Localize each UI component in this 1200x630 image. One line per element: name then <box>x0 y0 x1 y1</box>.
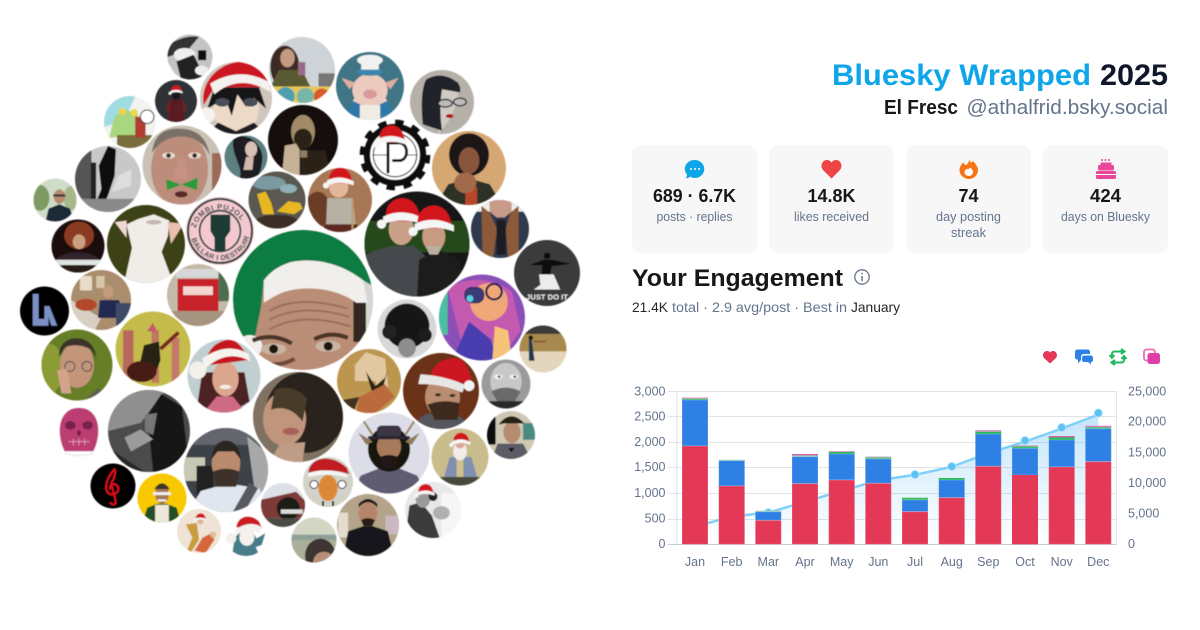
avatar cluster <box>19 34 581 564</box>
left axis labels: 1,500 <box>634 460 666 474</box>
avatar: pig chef <box>336 52 404 130</box>
cumulative area <box>695 414 1098 544</box>
stat card: streak: streak <box>951 226 987 240</box>
bar: Oct <box>1012 445 1038 544</box>
avatar: treble clef <box>90 464 136 508</box>
avatar: anime santa <box>199 62 272 134</box>
avatar: zombi pujol badge <box>186 196 254 266</box>
engagement summary: January <box>851 299 900 315</box>
month labels: Mar <box>758 555 779 569</box>
month labels <box>685 555 1109 569</box>
title: 2025 <box>1100 59 1168 92</box>
engagement summary: total · 2.9 avg/post · Best in <box>672 299 847 315</box>
icon: speech bubble <box>685 160 704 178</box>
avatar: black and white photographer <box>405 482 461 538</box>
stat card: likes <box>769 145 894 253</box>
right axis labels: 25,000 <box>1128 384 1166 398</box>
avatar: man rubbing eye <box>37 330 112 400</box>
month labels: Jul <box>907 555 923 569</box>
avatar: woman's long hair <box>471 200 529 258</box>
avatar: medieval illustration <box>177 509 221 553</box>
bar: Nov <box>1049 436 1075 544</box>
month labels: Feb <box>721 555 743 569</box>
bar: Apr <box>792 454 818 544</box>
avatar: man in suit outdoors <box>30 178 79 222</box>
month labels: Oct <box>1015 555 1035 569</box>
icon: cake <box>1096 159 1116 179</box>
avatar: just do it <box>514 240 580 306</box>
avatar: yellow mushrooms <box>248 172 306 231</box>
stat card: streak: 74 <box>958 186 978 206</box>
avatar: people at table <box>71 270 131 330</box>
chart legend icons <box>1043 349 1160 365</box>
month labels: Aug <box>941 555 963 569</box>
month labels: Nov <box>1051 555 1074 569</box>
bar: May <box>829 451 855 544</box>
month labels: Sep <box>977 555 999 569</box>
left axis labels: 0 <box>659 537 666 551</box>
avatar: poirot <box>487 411 535 459</box>
bar: Aug <box>939 478 965 544</box>
stat card: likes: likes received <box>794 210 869 224</box>
bar: Dec <box>1085 426 1111 544</box>
right axis labels: 15,000 <box>1128 446 1166 460</box>
bar: Feb <box>719 460 745 544</box>
left axis labels: 3,000 <box>634 384 666 398</box>
avatar: baby in santa hat <box>305 168 372 232</box>
avatar: woman with long dark hair <box>224 136 268 178</box>
left axis labels <box>634 384 666 551</box>
left axis labels: 2,500 <box>634 410 666 424</box>
bar: Jul <box>902 498 928 544</box>
avatar: two men in santa hats <box>364 192 470 296</box>
month labels: Jun <box>868 555 888 569</box>
avatar: man in black jacket <box>337 494 399 556</box>
avatar: sepia statue <box>268 105 338 175</box>
avatar: curly-haired woman <box>253 372 345 462</box>
heading: your engagement: Your Engagement <box>632 265 843 292</box>
avatar: woman with phone <box>269 37 335 106</box>
icon: info <box>855 270 869 284</box>
avatar: man's head at bottom <box>290 517 338 564</box>
avatar: man with green bow moustache <box>142 126 222 207</box>
avatar: yellow background man <box>138 474 186 522</box>
stat card: days on Bluesky: 424 <box>1090 186 1121 206</box>
avatar: moustached old man <box>482 360 530 408</box>
user name and handle: @athalfrid.bsky.social <box>966 97 1168 119</box>
bar: Jan <box>682 397 708 544</box>
avatar: abstract figure <box>337 349 401 413</box>
avatar: coca-cola sign <box>167 264 229 326</box>
avatar: bearded man in santa hat <box>403 353 479 429</box>
icon: flame <box>960 159 978 179</box>
bar: Mar <box>755 511 781 544</box>
engagement summary <box>632 299 900 315</box>
avatar: black and white legs <box>75 146 141 212</box>
avatar: cartoon goblin <box>104 96 156 148</box>
avatar: black logo <box>20 286 69 336</box>
line markers <box>764 409 1102 517</box>
legend: likes <box>1043 351 1057 364</box>
stacked bar and line chart <box>634 384 1166 569</box>
month labels: Apr <box>795 555 815 569</box>
avatar: santa statue <box>432 428 488 486</box>
engagement summary: 21.4K <box>632 299 669 315</box>
avatar: zombi pujol badge: BALLAR I DESTRUIR <box>191 236 250 261</box>
stat card: likes: 14.8K <box>808 186 856 206</box>
icon: heart <box>822 160 841 178</box>
stat card: streak: day posting <box>936 210 1001 224</box>
user name and handle <box>884 97 1168 119</box>
avatar: pig-iron gear P <box>362 122 428 188</box>
stat card: streak <box>906 145 1031 253</box>
avatar: dark red figure <box>155 80 197 122</box>
avatar: zombi pujol badge: ZOMBI PUJOL <box>190 204 244 228</box>
month labels: Dec <box>1087 555 1109 569</box>
right axis labels: 5,000 <box>1128 506 1159 520</box>
avatar: yellow flag with red stripes <box>116 312 190 386</box>
month labels: May <box>830 555 854 569</box>
right axis labels: 0 <box>1128 537 1135 551</box>
avatar: blue drawing in santa hat <box>224 512 268 556</box>
avatar: pink skull <box>55 408 103 456</box>
left axis labels: 1,000 <box>634 486 666 500</box>
legend: reposts <box>1110 349 1126 365</box>
title: Bluesky Wrapped <box>832 59 1091 92</box>
avatar: black and white smoker <box>108 390 190 472</box>
avatar: main profile in green santa hat <box>233 230 373 370</box>
bar: Jun <box>865 456 891 544</box>
stat card: days on Bluesky <box>1043 145 1168 253</box>
stat card: posts and replies: posts · replies <box>656 210 732 224</box>
avatar: covered bridge <box>261 483 305 527</box>
avatar: smiling woman in santa hat <box>188 340 260 412</box>
legend: replies <box>1075 350 1093 364</box>
stat card: posts and replies <box>632 145 757 253</box>
avatar: man in deer hat <box>348 412 430 494</box>
avatar: curly hair black and white <box>378 300 436 358</box>
right axis labels <box>1128 384 1166 551</box>
stat card: posts and replies: 689 · 6.7K <box>653 186 736 206</box>
avatar: white goat <box>107 205 185 283</box>
avatar: black and white drinker <box>168 34 212 80</box>
avatar: cartoon chicken in santa hat <box>303 457 353 507</box>
chart gridlines and axes <box>668 392 1116 544</box>
left axis labels: 2,000 <box>634 435 666 449</box>
avatar: jimi hendrix <box>432 131 506 205</box>
stat card: days on Bluesky: days on Bluesky <box>1061 210 1151 224</box>
user name and handle: El Fresc <box>884 97 958 119</box>
right axis labels: 10,000 <box>1128 476 1166 490</box>
bars <box>682 397 1111 544</box>
left axis labels: 500 <box>645 512 666 526</box>
legend: quotes <box>1144 350 1160 364</box>
avatar: small courtyard photo <box>520 326 566 372</box>
cumulative line <box>695 414 1098 527</box>
avatar: just do it: JUST DO IT <box>526 292 568 301</box>
month labels: Jan <box>685 555 705 569</box>
right axis labels: 20,000 <box>1128 414 1166 428</box>
bar: Sep <box>975 430 1001 544</box>
avatar: witch <box>52 220 104 272</box>
avatar: bearded man in car <box>184 428 268 512</box>
avatar: colorful woman with glasses <box>439 274 525 360</box>
avatar: sketch of woman with glasses <box>410 70 474 134</box>
